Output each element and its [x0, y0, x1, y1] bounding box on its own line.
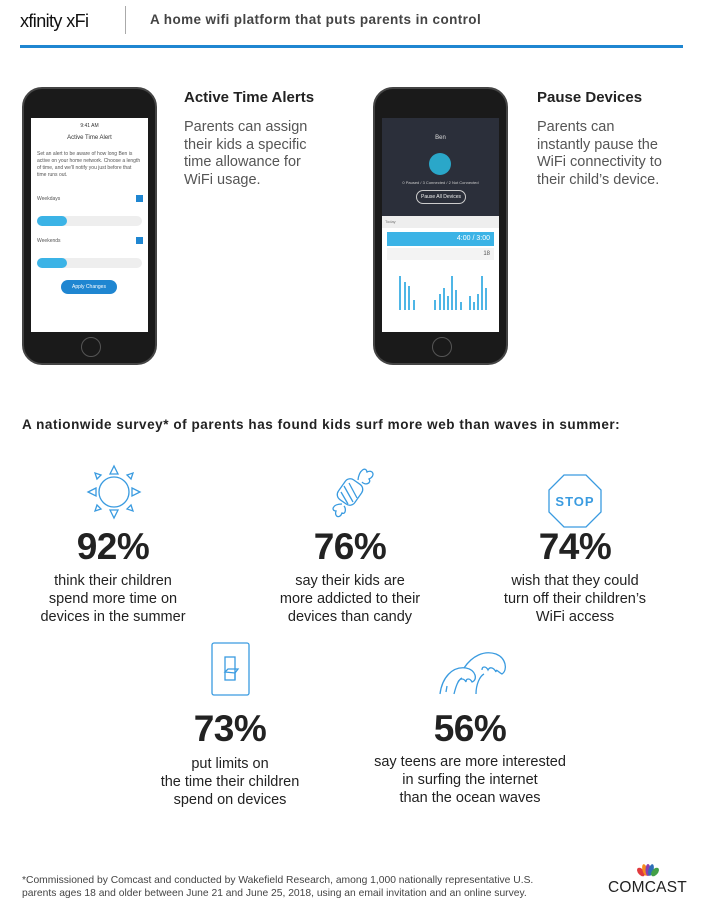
stat: 74%: turn off their children’s [504, 591, 646, 607]
phone: pause devices: 0 Paused / 3 Connected / 2 Not Connected [402, 180, 479, 185]
stat: 76%: devices than candy [288, 609, 412, 625]
text: Pause Devices: their child’s device. [537, 172, 659, 188]
icon: light switch [211, 642, 250, 696]
phone: pause devices [373, 87, 508, 365]
stat: 92%: 92% [77, 526, 149, 567]
icon: stop sign: STOP [555, 494, 595, 509]
phone: pause devices: 18 [483, 251, 490, 257]
text: Pause Devices: Pause Devices [537, 89, 642, 106]
stat: 92%: spend more time on [49, 591, 177, 607]
phone: active time alert: Set an alert to be aware of how long Ben is active on your home network. Choose a length of time, and we'll notify you just before that time runs out. [37, 151, 140, 178]
stat: 92%: devices in the summer [40, 609, 186, 625]
stat: 74%: 74% [539, 526, 611, 567]
stat: 73%: spend on devices [174, 792, 286, 808]
stat: 92% [40, 464, 186, 625]
stat: 73%: 73% [194, 708, 266, 749]
phone: pause devices: Ben [435, 135, 446, 141]
phone: active time alert: 9:41 AM [80, 123, 99, 129]
phone: pause devices: Today [385, 219, 396, 224]
text: Pause Devices: instantly pause the [537, 136, 658, 152]
stat: 56%: say teens are more interested [374, 754, 566, 770]
logo: Comcast: COMCAST [608, 879, 687, 896]
stat: 73% [160, 642, 299, 808]
stat: 56%: in surfing the internet [402, 772, 538, 788]
stat: 76% [280, 468, 420, 625]
survey heading: A nationwide survey* of parents has found kids surf more web than waves in summer: [22, 417, 620, 432]
text: Pause Devices [537, 89, 662, 188]
stat: 73%: put limits on [191, 756, 269, 772]
text: Active Time Alerts: WiFi usage. [184, 172, 261, 188]
stat: 76%: more addicted to their [280, 591, 420, 607]
text: Active Time Alerts: their kids a specific [184, 136, 306, 152]
text: Pause Devices: WiFi connectivity to [537, 154, 662, 170]
stat: 56%: than the ocean waves [399, 790, 541, 806]
logo: xfinity xFi: xfinity xFi [20, 11, 88, 31]
phone: active time alert: Weekends [37, 238, 61, 244]
icon: candy [332, 468, 374, 518]
logo: Comcast [608, 864, 687, 896]
phone: active time alert: Active Time Alert [67, 135, 112, 141]
phone: pause devices: Pause All Devices [421, 194, 461, 200]
stat: 92%: think their children [54, 573, 172, 589]
icon: waves [439, 652, 506, 694]
phone: active time alert: Apply Changes [72, 284, 106, 290]
phone: active time alert: Weekdays [37, 196, 60, 202]
text: Active Time Alerts [184, 89, 314, 188]
text: Active Time Alerts: Parents can assign [184, 119, 307, 135]
phone: pause devices: 4:00 / 3:00 [457, 235, 490, 242]
footnote: *Commissioned by Comcast and conducted by Wakefield Research, among 1,000 nationally representative U.S. parents ages 18 and older between June 21 and June 25, 2018, using an email invitation and an online survey. [22, 875, 533, 899]
stat: 73%: the time their children [161, 774, 299, 790]
stat: 56%: 56% [434, 708, 506, 749]
stat: 74% [504, 474, 646, 625]
stat: 76%: 76% [314, 526, 386, 567]
stat: 56% [374, 652, 566, 806]
stat: 76%: say their kids are [295, 573, 405, 589]
stat: 74%: wish that they could [511, 573, 639, 589]
tagline: A home wifi platform that puts parents in control [150, 12, 481, 27]
icon: sun [86, 464, 142, 520]
text: Active Time Alerts: Active Time Alerts [184, 89, 314, 106]
text: Active Time Alerts: time allowance for [184, 154, 301, 170]
phone: active time alert [22, 87, 157, 365]
text: Pause Devices: Parents can [537, 119, 614, 135]
stat: 74%: WiFi access [536, 609, 614, 625]
icon: stop sign [548, 474, 602, 528]
